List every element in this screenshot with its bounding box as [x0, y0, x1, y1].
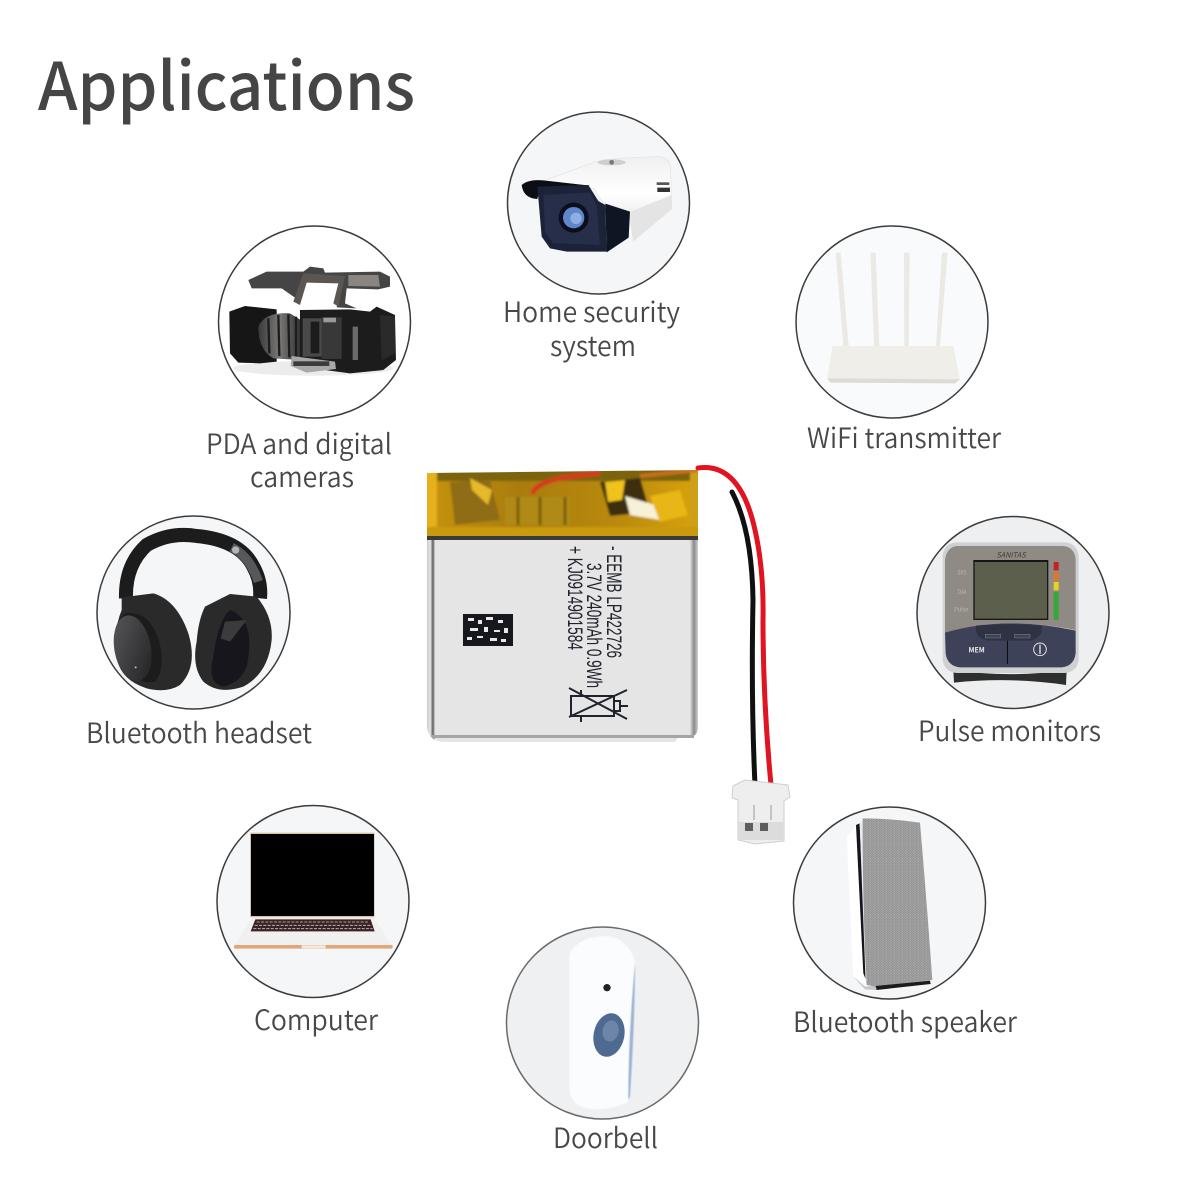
yellow tape top — [427, 470, 698, 536]
label: Doorbell — [553, 1117, 658, 1157]
icon: crossed-out bin — [569, 688, 628, 722]
panel: Bluetooth headset — [86, 516, 312, 752]
device brand: SANITAS — [996, 550, 1027, 561]
black wire — [732, 492, 755, 785]
icon: doorbell — [569, 936, 635, 1109]
label: Bluetooth speaker — [793, 1001, 1017, 1041]
label: Computer — [254, 999, 378, 1039]
scale labels: DIA — [957, 587, 967, 596]
button label: MEM — [969, 645, 985, 655]
print line 2: 3.7V 240mAh 0.9Wh — [582, 563, 605, 688]
panel: Pulse monitors — [917, 516, 1109, 750]
title: Applications — [38, 34, 415, 130]
label: cameras: cameras — [250, 456, 354, 496]
battery body — [427, 536, 698, 742]
battery — [420, 465, 790, 844]
print line 3: + KJ0914901584 — [563, 546, 586, 650]
icon: router — [827, 253, 960, 383]
icon: blood pressure monitor — [943, 542, 1079, 685]
data matrix code — [463, 614, 513, 646]
label: system: system — [550, 325, 636, 365]
scale labels: SYS — [957, 567, 967, 576]
connector — [732, 780, 790, 844]
icon: laptop — [234, 833, 393, 949]
panel: PDA and digital cameras — [206, 226, 410, 496]
panel: home security system — [503, 112, 690, 365]
label: WiFi transmitter — [807, 417, 1001, 457]
icon: speaker — [847, 818, 932, 990]
label: Pulse monitors — [918, 710, 1101, 750]
scale labels — [954, 567, 969, 614]
panel: Bluetooth speaker — [793, 807, 1017, 1041]
print line 1: - EEMB LP422726 — [602, 546, 625, 658]
panel: Computer — [217, 806, 409, 1039]
scale labels: Pulse — [954, 605, 969, 614]
panel: WiFi transmitter — [796, 226, 1001, 457]
battery print — [563, 546, 625, 688]
label: Bluetooth headset — [86, 712, 312, 752]
red wire — [698, 468, 771, 785]
label: home security: Home security — [503, 291, 680, 331]
wires — [698, 468, 771, 785]
icon: security camera — [522, 157, 672, 252]
icon: headphones — [109, 535, 272, 690]
label: PDA and digital: PDA and digital — [206, 423, 392, 463]
icon: video camera — [229, 267, 396, 376]
panel: Doorbell — [506, 927, 698, 1157]
